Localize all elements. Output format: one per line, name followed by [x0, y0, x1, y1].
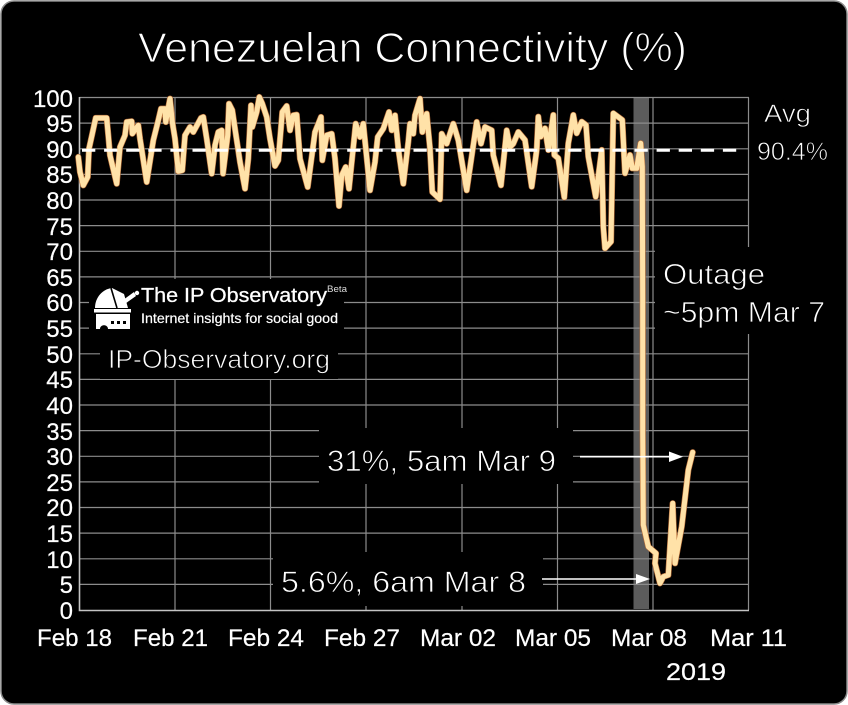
callout: 31%: 31%, 5am Mar 9 — [327, 445, 556, 478]
y axis labels: 50 — [46, 342, 73, 369]
line chart — [78, 97, 835, 610]
connectivity curve — [78, 97, 693, 583]
average label — [757, 100, 828, 166]
arrow: 31% — [580, 452, 683, 462]
y axis labels: 40 — [46, 393, 73, 420]
outage callout: Outage — [663, 259, 765, 291]
y axis labels: 20 — [46, 495, 73, 522]
x axis labels: Mar 05 — [515, 625, 591, 652]
logo: The IP Observatory — [94, 284, 348, 329]
y axis labels: 65 — [46, 265, 73, 292]
x axis labels: Mar 08 — [611, 625, 687, 652]
y axis labels: 45 — [46, 367, 73, 394]
y axis labels: 10 — [46, 547, 73, 574]
title: Venezuelan Connectivity (%) — [138, 24, 687, 71]
x axis labels: Mar 02 — [420, 625, 496, 652]
website label: IP-Observatory.org — [108, 344, 330, 374]
y axis and x axis lines — [80, 97, 749, 610]
average label: Avg — [764, 100, 811, 128]
shaded outage band — [634, 98, 649, 609]
x axis labels: Feb 21 — [133, 625, 208, 652]
arrow: 5.6% — [542, 574, 650, 584]
logo name: The IP Observatory — [141, 285, 327, 307]
x axis labels: 2019 — [666, 659, 726, 686]
y axis labels: 75 — [46, 214, 73, 241]
x axis labels: Feb 18 — [37, 625, 112, 652]
x axis labels: Feb 27 — [324, 625, 400, 652]
y axis labels: 80 — [46, 188, 73, 215]
y axis labels: 5 — [60, 572, 73, 599]
chart gridlines — [80, 98, 749, 610]
logo beta mark: Beta — [327, 284, 348, 295]
y axis labels: 25 — [46, 470, 73, 497]
y axis labels: 95 — [46, 111, 73, 138]
y axis labels: 90 — [46, 137, 73, 164]
y axis labels: 100 — [33, 86, 73, 113]
x axis labels: Feb 24 — [228, 625, 304, 652]
x axis labels — [37, 625, 787, 686]
outage callout: ~5pm Mar 7 — [663, 297, 825, 329]
icon: observatory dome — [94, 288, 139, 329]
x axis labels: Mar 11 — [710, 625, 787, 652]
y axis labels: 85 — [46, 162, 73, 189]
y axis labels: 70 — [46, 239, 73, 266]
y axis labels: 30 — [46, 444, 73, 471]
y axis labels — [33, 86, 73, 625]
label masks — [89, 247, 835, 606]
y axis labels: 15 — [46, 521, 73, 548]
average label: 90.4% — [757, 138, 828, 166]
outage callout — [663, 259, 825, 329]
callout: 5.6%: 5.6%, 6am Mar 8 — [281, 566, 526, 599]
logo tagline: Internet insights for social good — [141, 310, 338, 326]
y axis labels: 60 — [46, 290, 73, 317]
y axis labels: 0 — [60, 598, 73, 625]
y axis labels: 55 — [46, 316, 73, 343]
y axis labels: 35 — [46, 419, 73, 446]
average dashed line — [82, 149, 741, 152]
